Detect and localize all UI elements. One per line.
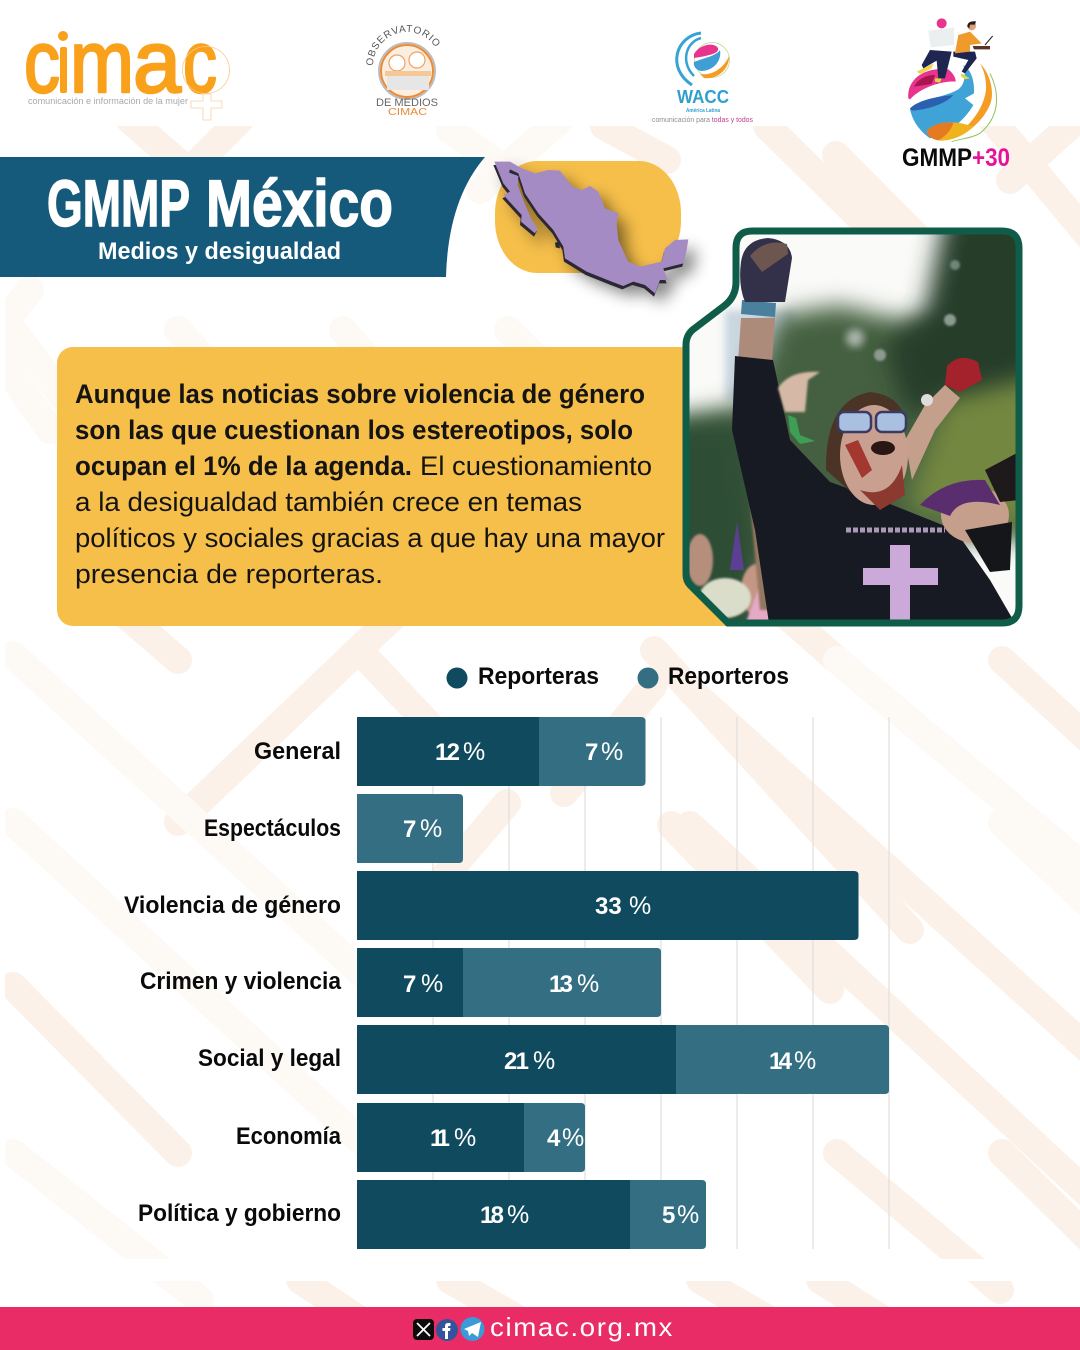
bar: Economía: 4: [547, 1125, 561, 1152]
bar: Violencia de género: [124, 871, 858, 940]
face with glasses: [826, 392, 908, 510]
bar: Economía: %: [562, 1124, 584, 1152]
icon: map of Mexico on yellow shape: [493, 161, 696, 303]
bar: Crimen y violencia: 13: [549, 971, 573, 998]
bar: Social y legal: Social y legal: [198, 1045, 341, 1072]
shirt print: [846, 530, 945, 623]
chart legend: Reporteras: [478, 663, 599, 690]
bar: Social y legal: [198, 1025, 889, 1094]
left crowd: [690, 504, 768, 620]
logo: observatorio de medios: DE MEDIOS: [376, 97, 438, 109]
website: cimac.org.mx: [490, 1312, 674, 1342]
logo: GMMP+30: GMMP: [902, 144, 972, 172]
bar: General: 7: [585, 739, 598, 766]
logo: cimac: c: [183, 12, 217, 111]
paragraph: Aunque las noticias sobre violencia de género: [75, 379, 645, 409]
logo: WACC: WACC: [677, 87, 729, 107]
bar: Economía: [236, 1103, 585, 1172]
bar: General: %: [463, 738, 485, 766]
logo: cimac: a: [133, 12, 181, 111]
title: GMMP: [47, 166, 190, 240]
bar: Espectáculos: [204, 794, 463, 863]
paragraph: [75, 379, 665, 589]
logo: WACC: [652, 33, 753, 124]
bar: General: General: [254, 738, 341, 765]
chart legend: [446, 663, 789, 690]
bar: Crimen y violencia: %: [421, 970, 443, 998]
woman with purple headscarf: [920, 452, 1019, 572]
logo: GMMP+30: [902, 18, 1010, 172]
logo: WACC: América Latina: [686, 108, 720, 114]
bar: Economía: Economía: [236, 1123, 342, 1150]
text card: [57, 347, 747, 626]
bar: Crimen y violencia: [140, 948, 661, 1017]
bar: Política y gobierno: %: [677, 1201, 699, 1229]
title: México: [206, 166, 393, 240]
footer bar: [0, 1307, 1080, 1350]
paragraph: a la desigualdad también crece en temas: [75, 487, 582, 517]
paragraph: ocupan el 1% de la agenda.: [75, 451, 412, 481]
logo: cimac: c: [24, 12, 60, 111]
pointing hand: [778, 372, 820, 412]
bar: Social y legal: 21: [504, 1048, 529, 1075]
bar: Social y legal: 14: [769, 1048, 793, 1075]
bar: General: [254, 717, 646, 786]
bar: Espectáculos: 7: [403, 816, 416, 843]
bar: Espectáculos: %: [420, 815, 442, 843]
bar: General: %: [601, 738, 623, 766]
raised arm and sleeve: [732, 238, 1019, 630]
bar: Social y legal: %: [533, 1047, 555, 1075]
logo: observatorio de medios: CIMAC: [388, 107, 427, 118]
bar: Política y gobierno: %: [507, 1201, 529, 1229]
bar: Política y gobierno: 18: [480, 1202, 504, 1229]
bar: Economía: %: [454, 1124, 476, 1152]
bar: Social y legal: %: [794, 1047, 816, 1075]
logo: cimac: m: [70, 12, 134, 111]
bar: Violencia de género: %: [629, 892, 651, 920]
icon: Facebook: [436, 1319, 458, 1341]
bar: Crimen y violencia: 7: [403, 971, 416, 998]
bar: Economía: 11: [430, 1125, 450, 1152]
bar: Política y gobierno: [138, 1180, 706, 1249]
photo: protester with raised fist: [682, 228, 1022, 626]
bar: General: 12: [435, 739, 460, 766]
logo: observatorio de medios: OBSERVATORIO: [366, 25, 440, 66]
paragraph: El cuestionamiento: [420, 451, 652, 481]
paragraph: presencia de reporteras.: [75, 559, 383, 589]
bar: Espectáculos: Espectáculos: [204, 815, 341, 842]
subtitle: Medios y desigualdad: [98, 238, 341, 265]
chart legend: Reporteros: [668, 663, 789, 690]
bar: Crimen y violencia: %: [577, 970, 599, 998]
bar: Violencia de género: 33: [595, 893, 622, 920]
bar: Violencia de género: Violencia de género: [124, 892, 341, 919]
icon: Telegram: [460, 1317, 484, 1341]
bar chart: [124, 717, 889, 1249]
title banner: [0, 157, 485, 277]
other raised arm: [905, 358, 982, 480]
bar: Política y gobierno: Política y gobierno: [138, 1200, 341, 1227]
logo: GMMP+30: +30: [972, 144, 1010, 172]
bar: Política y gobierno: 5: [662, 1202, 675, 1229]
title: [47, 166, 393, 240]
logo: cimac: comunicación e información de la mujer: [28, 96, 188, 106]
logo: WACC: comunicación para todas y todos: [652, 117, 753, 124]
logo: observatorio de medios: [366, 25, 440, 118]
paragraph: son las que cuestionan los estereotipos, solo: [75, 415, 633, 445]
logo: cimac: [24, 12, 230, 120]
bar: Crimen y violencia: Crimen y violencia: [140, 968, 342, 995]
paragraph: políticos y sociales gracias a que hay una mayor: [75, 523, 665, 553]
icon: X: [413, 1319, 434, 1340]
